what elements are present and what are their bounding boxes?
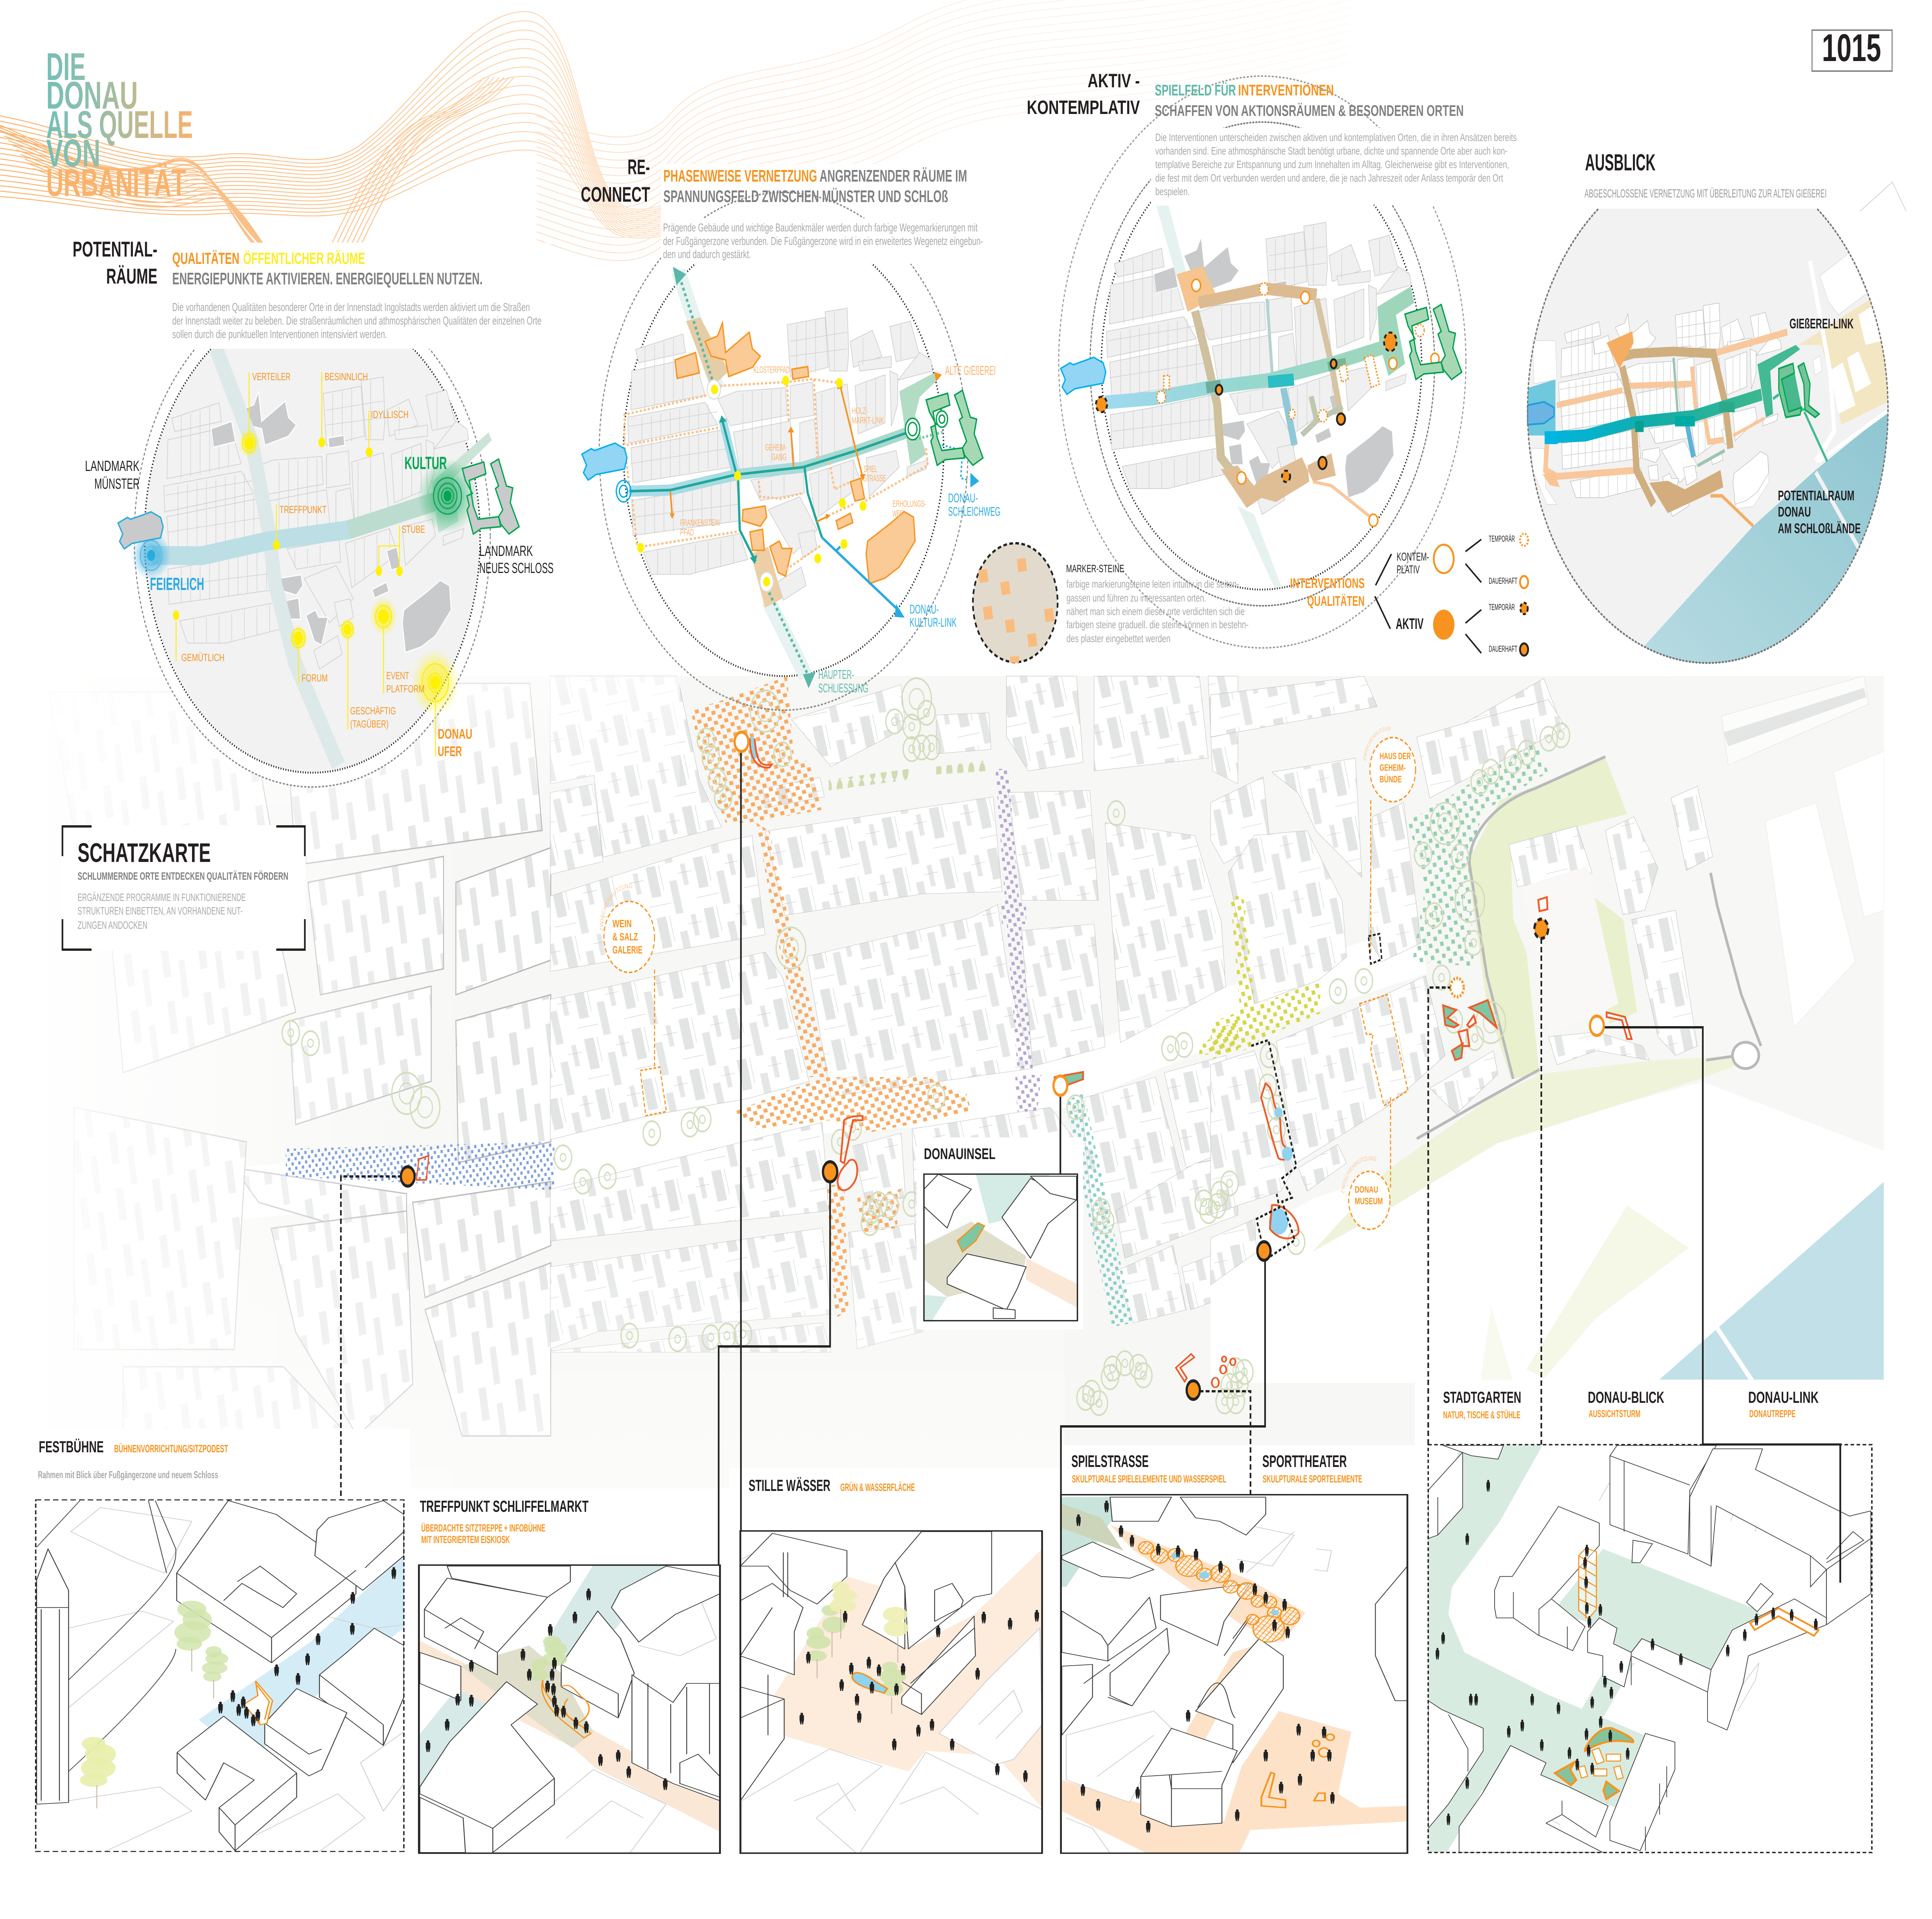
heading: Potentialräume: RÄUME	[106, 264, 157, 289]
labels: Potentialräume map: GESCHÄFTIG	[350, 705, 396, 717]
text: marker-steine: nähert man sich einem dieser orte verdichten sich die	[1066, 606, 1245, 618]
panel: Schatzkarte heading	[61, 825, 306, 951]
labels: Re-Connect map: DONAU-	[948, 491, 978, 505]
panel: Spielstrasse and Sporttheater headings: SPIELSTRASSE	[1071, 1452, 1149, 1471]
labels: Re-Connect map: SCHLEICHWEG	[948, 505, 1000, 518]
text: marker-steine	[1066, 563, 1248, 645]
panel: Treffpunkt Schliffelmarkt heading: TREFFPUNKT SCHLIFFELMARKT	[420, 1497, 588, 1515]
heading: Re-Connect: CONNECT	[581, 183, 650, 207]
labels: Re-Connect map: SPIEL	[864, 464, 877, 474]
decorative wave lines	[0, 12, 688, 284]
labels: Re-Connect map: HAUPTER-	[818, 668, 854, 682]
labels: Potentialräume map	[85, 371, 554, 759]
circle map: Ausblick: POTENTIALRAUM	[1778, 488, 1854, 503]
panel: Treffpunkt Schliffelmarkt heading: ÜBERDACHTE SITZTREPPE + INFOBÜHNE	[421, 1522, 545, 1534]
leader lines from map markers to panels	[341, 750, 1841, 1583]
circle map: Potentialräume	[118, 287, 519, 787]
legend: Interventions Qualitäten	[1290, 534, 1528, 656]
panel: Donauinsel white ground	[917, 1137, 1083, 1329]
heading: Aktiv-Kontemplativ: die fest mit dem Ort verbunden werden und andere, die je nach Jahreszeit oder Anlass temporär den Ort	[1155, 172, 1503, 184]
labels: Potentialräume map: FEIERLICH	[150, 575, 204, 594]
map overlays: coloured stone fields	[286, 676, 1548, 1327]
map trees	[282, 678, 1570, 1415]
legend: Interventions Qualitäten: KONTEM-	[1396, 550, 1429, 563]
heading: Potentialräume: POTENTIAL-	[73, 237, 157, 262]
labels: Re-Connect map: HOLZ-	[852, 406, 868, 416]
legend: Interventions Qualitäten: INTERVENTIONS	[1290, 576, 1365, 591]
callout: Wein & Salz Galerie	[599, 883, 667, 1116]
callout: Wein & Salz Galerie: GALERIE	[612, 944, 643, 956]
labels: Re-Connect map: KLOSTERPFAD	[753, 365, 790, 375]
labels: Potentialräume map: LANDMARK	[85, 457, 139, 474]
white panel: Potentialräume text ground	[0, 243, 550, 349]
labels: Potentialräume map: EVENT	[386, 670, 409, 682]
main title: ALS QUELLE	[46, 103, 193, 146]
callout: Donau Museum	[1340, 994, 1408, 1229]
main title: DONAU	[46, 74, 138, 117]
legend: Interventions Qualitäten: PLATIV	[1396, 563, 1420, 576]
text: marker-steine: farbigen steine graduell. die steine können in bestehn-	[1066, 619, 1248, 631]
panel: Festbühne heading: FESTBÜHNE	[39, 1438, 104, 1456]
labels: Potentialräume map: DONAU	[438, 726, 473, 742]
panel: Schatzkarte heading: STRUKTUREN EINBETTEN, AN VORHANDENE NUT-	[78, 905, 243, 917]
white panel: Re-Connect text ground	[661, 218, 1019, 264]
text: marker-steine: gassen und führen zu interessanten orten.	[1066, 592, 1206, 604]
labels: Potentialräume map: LANDMARK	[479, 542, 533, 559]
circle map: Ausblick: AM SCHLOßLÄNDE	[1778, 521, 1861, 536]
heading: Re-Connect	[581, 156, 983, 261]
heading: Potentialräume: Die vorhandenen Qualitäten besonderer Orte in der Innenstadt Ingolstadts werden aktiviert um die Straßen	[172, 300, 530, 314]
legend: Interventions Qualitäten: AKTIV	[1396, 615, 1423, 632]
heading: Aktiv-Kontemplativ: vorhanden sind. Eine athmosphärische Stadt benötigt urbane, dichte und spannende Orte aber auch kon-	[1155, 145, 1507, 157]
heading: Re-Connect: SPANNUNGSFELD ZWISCHEN MÜNSTER UND SCHLOß	[663, 187, 948, 206]
white panel: Aktiv-Kontemplativ text ground	[1151, 128, 1517, 205]
panel: Stille Wässer axonometric	[740, 1531, 1042, 1853]
labels: Re-Connect map: SCHLIESSUNG	[818, 681, 868, 695]
heading: Aktiv-Kontemplativ: KONTEMPLATIV	[1027, 97, 1140, 119]
circle map: Aktiv-Kontemplativ	[1059, 76, 1466, 648]
labels: Re-Connect map	[680, 364, 1000, 695]
map interventions in red and orange	[417, 737, 1632, 1387]
panel: Stadtgarten, Donau-Blick, Donau-Link headings: DONAU-LINK	[1748, 1388, 1819, 1406]
inset: Donauinsel: DONAUINSEL	[924, 1146, 995, 1163]
panel: Stille Wässer heading	[748, 1476, 915, 1494]
panel: Stille Wässer heading: GRÜN & WASSERFLÄCHE	[840, 1482, 915, 1494]
circle map: Ausblick: DONAU	[1778, 504, 1811, 520]
project number box: 1015	[1822, 26, 1881, 70]
panel: Schatzkarte heading: SCHATZKARTE	[78, 838, 211, 868]
heading: Re-Connect: RE-	[628, 156, 650, 179]
panel: Stadtgarten, Donau-Blick, Donau-Link headings: STADTGARTEN	[1443, 1388, 1521, 1406]
panel: Stadtgarten, Donau-Blick, Donau-Link headings: AUSSICHTSTURM	[1588, 1408, 1640, 1419]
heading: Potentialräume: ÖFFENTLICHER RÄUME	[243, 249, 365, 267]
panel: Treffpunkt Schliffelmarkt heading: MIT INTEGRIERTEM EISKIOSK	[421, 1534, 510, 1545]
labels: Re-Connect map: FRANKENSTEIN	[680, 518, 720, 528]
faint wave lines right	[536, 0, 1348, 261]
heading: Aktiv-Kontemplativ: SPIELFELD FÜR	[1155, 82, 1236, 99]
main title	[46, 45, 193, 204]
labels: Re-Connect map: WEG	[893, 508, 903, 519]
labels: Re-Connect map: ALTE GIEßEREI	[945, 364, 996, 377]
heading: Potentialräume: QUALITÄTEN	[172, 249, 239, 267]
panel: Festbühne heading: Rahmen mit Blick über Fußgängerzone und neuem Schloss	[38, 1469, 218, 1480]
inset: Donauinsel	[924, 1146, 1077, 1321]
panel: Schatzkarte heading: SCHLUMMERNDE ORTE ENTDECKEN QUALITÄTEN FÖRDERN	[78, 870, 288, 882]
heading: Ausblick: AUSBLICK	[1585, 150, 1656, 176]
callout: Wein & Salz Galerie: WEIN	[612, 918, 632, 930]
heading: Re-Connect: der Fußgängerzone verbunden. Die Fußgängerzone wird in ein erweitertes Wegenetz eingebun-	[663, 234, 983, 248]
panel: Spielstrasse and Sporttheater headings: SKULPTURALE SPIELELEMENTE UND WASSERSPIEL	[1072, 1473, 1226, 1485]
heading: Re-Connect: PHASENWEISE VERNETZUNG	[663, 167, 817, 185]
labels: Re-Connect map: DONAU-	[910, 602, 939, 616]
panel: Schatzkarte heading: ZUNGEN ANDOCKEN	[78, 920, 148, 931]
panel: Festbühne heading	[38, 1438, 228, 1480]
circle map: Ausblick	[1527, 209, 1889, 664]
panel: Festbühne axonometric	[36, 1500, 404, 1851]
main title: URBANITÄT	[46, 161, 186, 204]
white masks below map	[0, 676, 1932, 1919]
panel: Spielstrasse and Sporttheater headings: SKULPTURALE SPORTELEMENTE	[1263, 1473, 1362, 1485]
panel: Stadtgarten axonometric	[1428, 1445, 1872, 1853]
labels: Potentialräume map: GEMÜTLICH	[181, 652, 224, 663]
labels: Re-Connect map: KULTUR-LINK	[910, 615, 957, 629]
labels: Potentialräume map: BESINNLICH	[325, 371, 368, 382]
heading: Re-Connect: ANGRENZENDER RÄUME IM	[820, 167, 967, 185]
labels: Potentialräume map: FORUM	[301, 672, 328, 684]
panel: Stadtgarten, Donau-Blick, Donau-Link headings: DONAUTREPPE	[1749, 1408, 1796, 1419]
legend: Interventions Qualitäten: TEMPORÄR	[1489, 535, 1515, 544]
text: marker-steine: farbige markierungsteine leiten intuitiv in die seiten-	[1066, 578, 1239, 590]
panel: Spielstrasse axonometric	[1061, 1495, 1407, 1853]
legend: Interventions Qualitäten: QUALITÄTEN	[1307, 593, 1365, 609]
labels: Potentialräume map: (TAGÜBER)	[350, 718, 388, 730]
panel: Stadtgarten, Donau-Blick, Donau-Link headings: DONAU-BLICK	[1588, 1388, 1664, 1406]
main title: DIE	[46, 45, 85, 88]
labels: Re-Connect map: PFAD	[680, 527, 694, 538]
callout: Wein & Salz Galerie: ZWISCHENNUTZUNG	[599, 883, 632, 931]
labels: Re-Connect map: ERHOLUNGS-	[893, 499, 926, 509]
callout: Haus der Geheimbünde: ZWISCHENNUTZUNG	[0, 0, 1391, 761]
labels: Re-Connect map: MARKT-LINK	[852, 415, 884, 426]
map markers	[401, 732, 1604, 1399]
heading: Aktiv-Kontemplativ: Die Interventionen unterscheiden zwischen aktiven und kontemplativen Orten, die in ihren Ansätzen bereits	[1155, 132, 1517, 144]
heading: Aktiv-Kontemplativ: SCHAFFEN VON AKTIONSRÄUMEN & BESONDEREN ORTEN	[1155, 102, 1464, 119]
callout: Donau Museum: DONAU	[1355, 1185, 1378, 1195]
heading: Ausblick: ABGESCHLOSSENE VERNETZUNG MIT ÜBERLEITUNG ZUR ALTEN GIEßEREI	[1585, 187, 1827, 200]
callout: Haus der Geheimbünde: GEHEIM-	[1379, 763, 1406, 773]
text: marker-steine: MARKER-STEINE	[1066, 563, 1124, 575]
heading: Re-Connect: Prägende Gebäude und wichtige Baudenkmäler werden durch farbige Wegemarkierungen mit	[663, 221, 978, 234]
treasure map: Schatzkarte	[47, 676, 1885, 1491]
heading: Ausblick	[1585, 150, 1906, 211]
circle map: Re-Connect	[582, 164, 1019, 710]
heading: Potentialräume: der Innenstadt weiter zu beleben. Die straßenräumlichen und athmosphärischen Qualitäten der einzelnen Orte	[172, 314, 541, 327]
callout: Haus der Geheimbünde: HAUS DER	[1379, 751, 1411, 761]
heading: Re-Connect: den und dadurch gestärkt.	[663, 247, 751, 261]
callout: Wein & Salz Galerie: & SALZ	[612, 931, 638, 943]
labels: Potentialräume map: MÜNSTER	[94, 475, 139, 492]
panel: Schatzkarte heading: ERGÄNZENDE PROGRAMME IN FUNKTIONIERENDE	[78, 892, 246, 904]
heading: Aktiv-Kontemplativ: INTERVENTIONEN	[1238, 82, 1334, 99]
text: marker-steine: des plaster eingebettet werden	[1066, 633, 1170, 645]
legend: Interventions Qualitäten: TEMPORÄR	[1489, 603, 1515, 612]
panel: Festbühne heading: BÜHNENVORRICHTUNG/SITZPODEST	[114, 1443, 228, 1455]
labels: Potentialräume map: PLATFORM	[386, 683, 425, 695]
legend: Interventions Qualitäten: DAUERHAFT	[1489, 577, 1517, 586]
labels: Re-Connect map: STRASSE	[864, 473, 886, 484]
panel: Spielstrasse and Sporttheater headings: SPORTTHEATER	[1262, 1452, 1347, 1471]
heading: Potentialräume: ENERGIEPUNKTE AKTIVIEREN. ENERGIEQUELLEN NUTZEN.	[172, 269, 483, 288]
labels: Potentialräume map: KULTUR	[405, 454, 447, 473]
callout: Donau Museum: ZWISCHENNUTZUNG	[1340, 1154, 1377, 1194]
main title: VON	[46, 132, 100, 175]
circle map: Ausblick: GIEßEREI-LINK	[1789, 316, 1854, 331]
panel: Stadtgarten, Donau-Blick, Donau-Link headings: NATUR, TISCHE & STÜHLE	[1443, 1409, 1520, 1421]
heading: Potentialräume: sollen durch die punktuellen Interventionen intensiviert werden.	[172, 327, 387, 341]
heading: Aktiv-Kontemplativ: templative Bereiche zur Entspannung und zum Innehalten im Alltag. Gleicherweise gibt es Interventionen,	[1155, 159, 1509, 171]
callout: Haus der Geheimbünde: BÜNDE	[1379, 774, 1402, 785]
panel: Stadtgarten, Donau-Blick, Donau-Link headings	[1443, 1388, 1819, 1421]
labels: Potentialräume map: UFER	[438, 744, 462, 759]
labels: Potentialräume map: VERTEILER	[252, 371, 291, 382]
labels: Re-Connect map: GEHEIM-	[765, 442, 787, 453]
heading: Aktiv-Kontemplativ: AKTIV -	[1088, 70, 1140, 92]
panel: Spielstrasse and Sporttheater headings	[1071, 1452, 1362, 1485]
labels: Re-Connect map: GANG	[772, 452, 787, 462]
marker-steine circle	[973, 543, 1058, 663]
panel: Treffpunkt Schliffelmarkt heading	[420, 1497, 588, 1545]
dashed route: Spielstrasse	[1251, 1040, 1296, 1260]
labels: Potentialräume map: IDYLLISCH	[371, 409, 408, 420]
panel: Stille Wässer heading: STILLE WÄSSER	[748, 1476, 830, 1494]
labels: Potentialräume map: TREFFPUNKT	[279, 504, 327, 515]
heading: Potentialräume	[73, 237, 541, 341]
heading: Aktiv-Kontemplativ: bespielen.	[1155, 186, 1190, 198]
labels: Potentialräume map: NEUES SCHLOSS	[479, 559, 554, 576]
callout: Donau Museum: MUSEUM	[1355, 1196, 1383, 1207]
labels: Potentialräume map: STUBE	[402, 524, 425, 535]
heading: Aktiv-Kontemplativ	[1027, 70, 1517, 198]
panel: Treffpunkt Schliffelmarkt axonometric	[419, 1565, 720, 1853]
legend: Interventions Qualitäten: DAUERHAFT	[1489, 645, 1517, 654]
